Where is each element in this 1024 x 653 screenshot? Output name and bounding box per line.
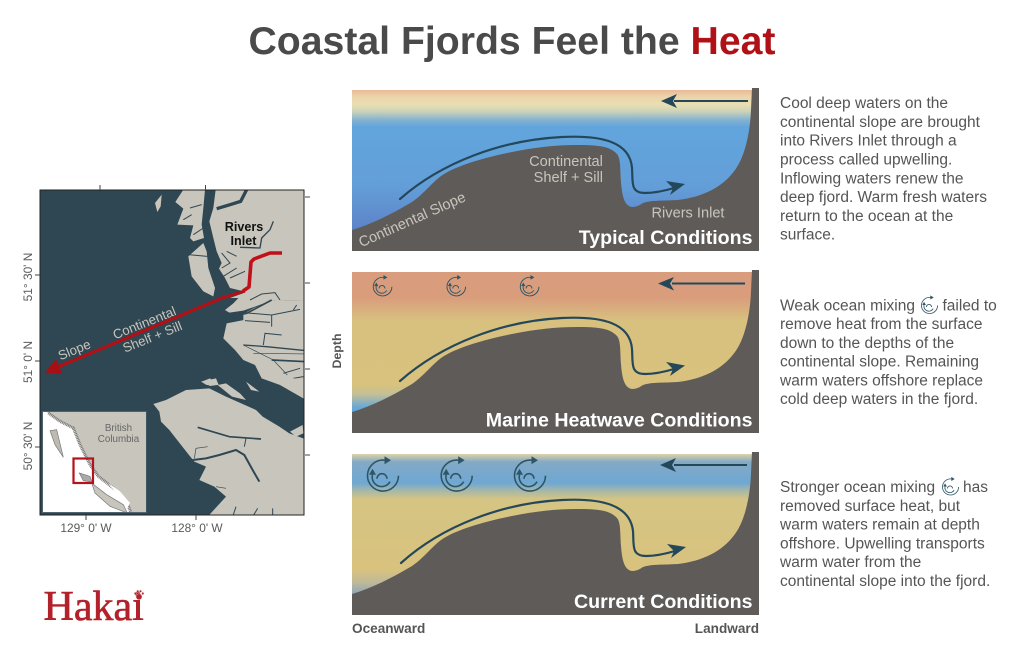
label: Rivers Inlet: Rivers Inlet bbox=[652, 206, 724, 222]
text block: marine heatwave: remove heat from the surface bbox=[780, 316, 982, 333]
text block: current conditions: offshore. Upwelling transports bbox=[780, 536, 985, 552]
Hakai logo: Hakai bbox=[44, 584, 144, 630]
map label: Slope: Slope bbox=[56, 337, 93, 363]
icon: mixing bbox=[921, 295, 938, 313]
map label: Rivers Inlet: Rivers bbox=[225, 220, 263, 234]
text block: typical conditions: deep fjord. Warm fresh waters bbox=[780, 189, 987, 206]
longitude labels: 128° 0' W bbox=[171, 521, 223, 535]
axis label: Landward: Landward bbox=[695, 621, 759, 636]
text block: typical conditions: Inflowing waters renew the bbox=[780, 170, 964, 188]
axis label: Oceanward: Oceanward bbox=[352, 621, 425, 636]
upwelling arrow bbox=[400, 318, 674, 381]
upwelling arrow bbox=[400, 137, 674, 199]
text block: marine heatwave: warm waters offshore replace bbox=[779, 372, 983, 390]
map label: Continental Shelf + Sill: Shelf + Sill bbox=[120, 318, 184, 356]
map land masses bbox=[153, 190, 307, 517]
title: Coastal Fjords Feel the Heat bbox=[248, 20, 776, 63]
latitude labels: 50° 30' N bbox=[21, 422, 35, 470]
label: Continental Shelf + Sill bbox=[529, 154, 603, 186]
text block: typical conditions: into Rivers Inlet through a bbox=[780, 133, 957, 150]
map label: Rivers Inlet: Inlet bbox=[231, 234, 257, 248]
text block: marine heatwave: Weak ocean mixing bbox=[780, 298, 915, 314]
mixing icons bbox=[373, 275, 539, 296]
longitude labels bbox=[60, 521, 223, 535]
text block: marine heatwave: down to the depths of the bbox=[780, 335, 954, 352]
map panel bbox=[21, 185, 310, 535]
panel heading: Marine Heatwave Conditions bbox=[486, 410, 753, 432]
panel: marine heatwave conditions bbox=[352, 270, 759, 433]
depth axis label: Depth bbox=[330, 333, 344, 369]
label: Continental Slope: Continental Slope bbox=[356, 190, 468, 251]
text block: typical conditions: Cool deep waters on the bbox=[780, 95, 948, 112]
inset map bbox=[42, 411, 147, 515]
map label: Rivers Inlet bbox=[225, 220, 263, 248]
map water background bbox=[40, 190, 304, 515]
label: Continental Shelf + Sill: Shelf + Sill bbox=[534, 170, 603, 186]
seabed bbox=[352, 88, 759, 251]
text block: current conditions: continental slope into the fjord. bbox=[780, 573, 990, 590]
latitude labels bbox=[21, 253, 35, 470]
seabed bbox=[352, 270, 759, 433]
surface outflow arrow bbox=[674, 464, 747, 466]
icon: mixing bbox=[942, 477, 959, 495]
panel: current conditions bbox=[352, 452, 759, 615]
inset locator square bbox=[74, 458, 93, 483]
surface outflow arrow bbox=[672, 282, 745, 284]
text block: current conditions: warm water from the bbox=[779, 554, 921, 571]
surface outflow arrow bbox=[674, 100, 748, 102]
panel heading: Current Conditions bbox=[574, 591, 753, 613]
label: Continental Shelf + Sill: Continental bbox=[529, 154, 603, 170]
text block: marine heatwave: continental slope. Remaining bbox=[780, 354, 979, 370]
seabed bbox=[352, 452, 759, 615]
text block: current conditions bbox=[779, 477, 990, 590]
text block: marine heatwave bbox=[779, 295, 997, 408]
longitude labels: 129° 0' W bbox=[60, 521, 112, 535]
red arrow transect bbox=[45, 253, 282, 374]
text block: typical conditions: continental slope are brought bbox=[780, 114, 981, 131]
inset map: Columbia bbox=[98, 434, 140, 445]
text block: marine heatwave: cold deep waters in the fjord. bbox=[780, 391, 978, 408]
text block: current conditions: removed surface heat, but bbox=[780, 498, 961, 515]
upwelling arrow bbox=[401, 500, 675, 563]
map label: Continental Shelf + Sill bbox=[111, 303, 184, 356]
text block: typical conditions: process called upwelling. bbox=[780, 152, 952, 168]
latitude labels: 51° 30' N bbox=[21, 253, 35, 301]
map ticks bbox=[35, 185, 310, 520]
panel heading: Typical Conditions bbox=[579, 227, 753, 249]
text block: typical conditions bbox=[780, 95, 987, 244]
inset label: British bbox=[105, 423, 132, 434]
text block: typical conditions: return to the ocean at the bbox=[780, 208, 953, 225]
mixing icons bbox=[368, 456, 546, 491]
text block: current conditions: Stronger ocean mixing bbox=[780, 479, 935, 496]
panel: typical conditions bbox=[352, 88, 759, 251]
text block: current conditions: has bbox=[963, 479, 988, 496]
text block: typical conditions: surface. bbox=[780, 226, 835, 244]
text block: current conditions: warm waters remain at depth bbox=[779, 516, 980, 534]
icon: paw bbox=[134, 590, 144, 600]
map label: Continental Shelf + Sill: Continental bbox=[111, 303, 178, 342]
map frame bbox=[40, 190, 304, 515]
text block: marine heatwave: failed to bbox=[942, 298, 997, 314]
latitude labels: 51° 0' N bbox=[21, 341, 35, 383]
